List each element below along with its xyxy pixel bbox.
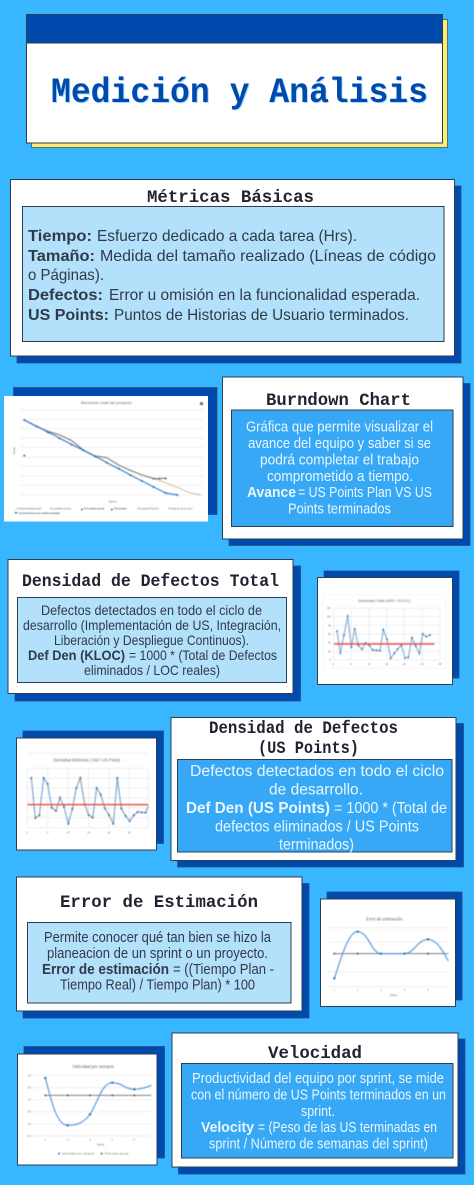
defect density KLOC line chart: 10 <box>368 664 371 666</box>
description box: de desarrollo. <box>269 782 363 798</box>
description box <box>232 410 453 526</box>
title: Medición y Análisis <box>51 73 428 113</box>
description box: sprint. <box>301 1104 335 1120</box>
description box: podrá completar el trabajo <box>260 452 419 468</box>
description box: = 1000 * (Total de Defectos <box>129 647 277 663</box>
defect density US points line chart: 5 <box>47 832 49 834</box>
defect density US points line chart: 15 <box>87 832 91 834</box>
burndown line chart: Terminado Próximo <box>137 508 159 511</box>
defect density KLOC line chart: 25 <box>421 664 424 666</box>
description box: = US Points Plan VS US <box>298 485 432 501</box>
defect density US points line chart: Densidad Defectos ( Def / US Point) <box>53 757 121 762</box>
velocity curve chart: Promedio actual <box>105 1152 129 1156</box>
chart panel: Error de estimación <box>320 892 462 1006</box>
burndown line chart <box>12 400 203 515</box>
defect density KLOC line chart: 20 <box>403 664 406 666</box>
description box: terminados) <box>279 836 354 854</box>
panel: Velocidad <box>172 1033 465 1174</box>
description box: = 1000 * (Total de <box>334 800 447 817</box>
chart panel: Densidad Defectos US Point <box>16 731 164 850</box>
velocity curve chart: 1 <box>45 1140 47 1142</box>
burndown line chart: Pendiente de la mano <box>168 508 193 511</box>
definitions box: US Points: <box>28 307 109 324</box>
defect density KLOC line chart: 5 <box>350 664 352 666</box>
velocity curve chart: 5 <box>134 1140 136 1142</box>
description box: sprint / Número de semanas del sprint) <box>209 1136 428 1152</box>
estimation error curve chart: 3 <box>380 990 382 992</box>
estimation error curve chart: 2 <box>357 990 359 992</box>
velocity curve chart: 3 <box>89 1140 91 1142</box>
description box <box>178 760 452 854</box>
defect density KLOC line chart: 20 <box>328 651 331 653</box>
definitions box: Tiempo: <box>28 228 92 245</box>
estimation error curve chart: Sprints <box>390 994 398 997</box>
defect density US points line chart: 0 <box>27 832 29 834</box>
description box: Permite conocer qué tan bien se hizo la <box>44 930 272 946</box>
velocity curve chart: 1.5 <box>27 1124 31 1126</box>
description box: Def Den (US Points) <box>186 800 330 817</box>
defect density KLOC line chart: Densidad Total (DEF / KLOC) <box>358 598 411 603</box>
heading: Velocidad: Velocidad <box>268 1045 362 1064</box>
definitions box: o Páginas). <box>28 267 104 284</box>
panel: Error de Estimación <box>16 877 309 1018</box>
chart panel: Densidad Total <box>318 571 459 684</box>
velocity curve chart: 2 <box>67 1140 69 1142</box>
description box: Def Den (KLOC) <box>28 647 125 663</box>
velocity curve chart: 2.0 <box>27 1112 31 1114</box>
defect density KLOC line chart: 15 <box>385 664 389 666</box>
defect density US points line chart <box>27 753 148 834</box>
estimation error curve chart: 4 <box>404 990 406 992</box>
burndown line chart: Comprometidas inicial <box>17 508 42 511</box>
title panel <box>26 14 448 148</box>
definitions box <box>22 206 444 342</box>
defect density KLOC line chart: 120 <box>327 608 331 610</box>
heading: Densidad de Defectos (US Points): (US Points) <box>258 740 359 759</box>
estimation error curve chart <box>328 916 448 997</box>
definitions box: Esfuerzo dedicado a cada tarea (Hrs). <box>97 228 357 245</box>
description box: comprometido a tiempo. <box>267 469 413 485</box>
description box: Defectos detectados en todo el ciclo de <box>41 602 262 618</box>
estimation error curve chart: 5 <box>427 990 429 992</box>
burndown line chart: Sin análisis previos <box>50 508 72 511</box>
velocity curve chart: Sprints <box>97 1144 105 1147</box>
description box: eliminados / LOC reales) <box>84 662 220 678</box>
description box: Error de estimación <box>42 962 169 978</box>
velocity curve chart: 7.5 <box>27 1100 31 1102</box>
description box: Productividad del equipo por sprint, se mide <box>192 1071 444 1087</box>
description box: = ((Tiempo Plan - <box>173 962 274 978</box>
title: Medición y Análisis <box>52 74 429 114</box>
burndown line chart: Sprints <box>109 500 117 504</box>
burndown line chart: Por análisis actual <box>84 508 105 511</box>
velocity curve chart <box>27 1064 151 1156</box>
defect density US points line chart: 10 <box>67 832 70 834</box>
description box: Avance <box>247 485 296 501</box>
velocity curve chart: 0.5 <box>27 1136 31 1138</box>
defect density US points line chart: 25 <box>128 832 131 834</box>
heading: Densidad de Defectos (US Points): Densidad de Defectos <box>209 720 398 739</box>
heading: Densidad de Defectos (US Points) <box>209 720 398 759</box>
heading: Densidad de Defectos Total: Densidad de Defectos Total <box>22 573 279 592</box>
heading: Métricas Básicas: Métricas Básicas <box>147 189 314 208</box>
defect density KLOC line chart: 60 <box>328 634 331 636</box>
defect density KLOC line chart: 0 <box>333 664 335 666</box>
description box: planeacion de un sprint o un proyecto. <box>47 946 268 962</box>
chart panel: Velocidad por semana <box>18 1046 164 1165</box>
definitions box: Medida del tamaño realizado (Líneas de código <box>100 248 436 265</box>
description box: desarrollo (Implementación de US, Integración, <box>23 617 281 633</box>
heading: Burndown Chart: Burndown Chart <box>266 392 411 411</box>
burndown line chart: Burndown chart del proyecto <box>81 400 132 405</box>
description box: Gráfica que permite visualizar el <box>246 420 433 436</box>
description box: Defectos detectados en todo el ciclo <box>190 763 444 780</box>
velocity curve chart: 1.9 <box>27 1075 31 1077</box>
definitions box: Error u omisión en la funcionalidad esperada. <box>109 287 420 304</box>
defect density US points line chart: 20 <box>108 832 111 834</box>
burndown line chart: Terminados <box>114 508 128 511</box>
burndown line chart: Horas <box>12 447 16 454</box>
defect density KLOC line chart: 30 <box>439 664 442 666</box>
description box: Points terminados <box>288 502 391 518</box>
description box: Tiempo Real) / Tiempo Plan) * 100 <box>60 978 255 994</box>
description box: Liberación y Despliegue Continuos). <box>54 632 249 648</box>
definitions box: Defectos: <box>28 287 103 304</box>
defect density KLOC line chart <box>323 595 446 668</box>
description box: defectos eliminados / US Points <box>215 818 419 836</box>
velocity curve chart: Velocidad por semana <box>72 1064 114 1069</box>
panel: Burndown Chart <box>222 377 470 546</box>
defect density KLOC line chart: 100 <box>327 617 331 619</box>
description box: Velocity <box>201 1120 254 1136</box>
estimation error curve chart: 1 <box>334 990 336 992</box>
panel: Métricas Básicas <box>10 180 461 363</box>
panel: Densidad de Defectos Total <box>8 560 300 701</box>
velocity curve chart: 9.6 <box>27 1088 31 1090</box>
description box <box>18 598 286 682</box>
description box: = (Peso de las US terminadas en <box>258 1120 437 1136</box>
velocity curve chart: Velocidad por semana <box>62 1152 95 1156</box>
definitions box: Puntos de Historias de Usuario terminados. <box>114 307 409 324</box>
description box: avance del equipo y saber si se <box>248 436 431 452</box>
defect density KLOC line chart: 40 <box>328 643 331 645</box>
estimation error curve chart: Error de estimación <box>366 916 403 921</box>
chart panel: Burndown chart <box>4 388 217 522</box>
defect density KLOC line chart: 80 <box>328 625 331 627</box>
velocity curve chart: 4 <box>112 1140 114 1142</box>
panel: Densidad de Defectos (US Points) <box>171 718 464 867</box>
description box <box>28 922 291 1003</box>
defect density KLOC line chart: 0 <box>329 660 331 662</box>
description box <box>182 1064 453 1158</box>
heading: Error de Estimación: Error de Estimación <box>60 894 258 913</box>
definitions box: Tamaño: <box>28 248 95 265</box>
burndown line chart: Comprometimos por análisis pasadas <box>18 512 61 515</box>
